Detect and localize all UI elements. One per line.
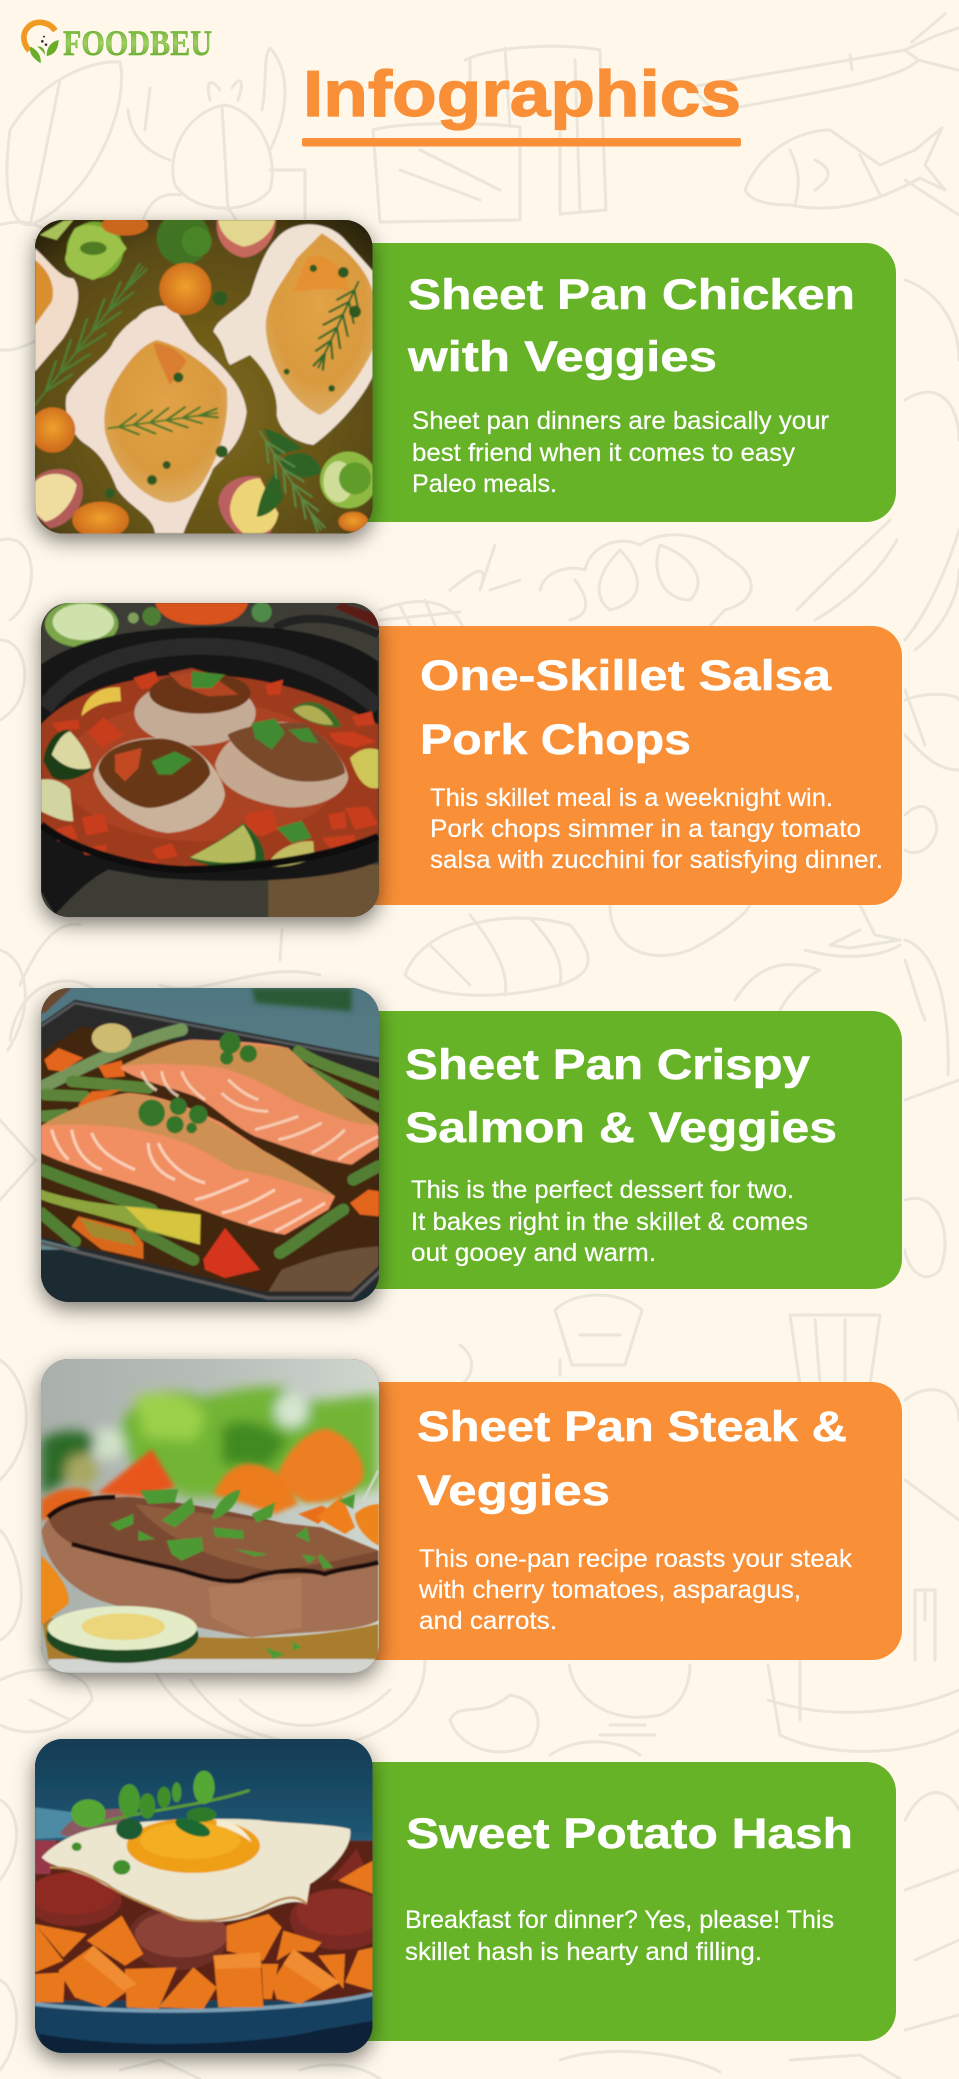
card [340,243,896,522]
panel: sweet potato hash [25,1734,896,2059]
body text: Breakfast for dinner? Yes, please! This [405,1906,834,1934]
card [345,626,902,905]
heading: Sweet Potato Hash [406,1810,853,1858]
body text [412,407,829,498]
body text: skillet hash is hearty and filling. [405,1938,762,1966]
title: Infographics [303,57,741,130]
heading [405,1041,837,1152]
image shadow [41,603,379,917]
card [345,1382,902,1660]
photo: fried egg over sweet potato hash [35,1739,372,2053]
body text: best friend when it comes to easy [412,439,796,467]
panel: one-skillet salsa pork chops [35,598,902,923]
body text: It bakes right in the skillet & comes [411,1208,808,1236]
body text [411,1176,808,1267]
heading: Salmon & Veggies [405,1104,837,1152]
body text: This skillet meal is a weeknight win. [430,784,833,812]
card [345,1011,902,1289]
image shadow [41,1359,379,1673]
panel: sheet pan chicken [26,212,896,540]
heading: Sheet Pan Crispy [405,1041,810,1089]
body text: and carrots. [419,1607,557,1635]
heading: with Veggies [407,333,717,381]
panel: sheet pan crispy salmon [35,983,902,1308]
photo: chicken and vegetables [26,212,380,540]
icon: logo ring and leaves [24,22,59,63]
body text: Paleo meals. [412,470,557,498]
body text: out gooey and warm. [411,1239,656,1267]
image shadow [41,988,379,1302]
body text [405,1906,834,1966]
card [340,1762,896,2041]
body text: This is the perfect dessert for two. [411,1176,794,1204]
heading: Sheet Pan Steak & [417,1403,847,1451]
logo wordmark: FOODBEU [63,23,212,63]
heading: One-Skillet Salsa [420,652,832,700]
body text [430,784,883,874]
title underline [302,138,741,146]
panel: sheet pan steak and veggies [35,1354,902,1679]
image shadow [35,1739,372,2053]
image shadow [35,220,372,534]
body text: with cherry tomatoes, asparagus, [418,1576,801,1604]
heading: Veggies [417,1467,610,1515]
body text: salsa with zucchini for satisfying dinner. [430,846,883,874]
heading [420,652,832,764]
heading [417,1403,847,1515]
heading: Pork Chops [420,716,691,764]
body text: This one-pan recipe roasts your steak [419,1545,853,1573]
body text [418,1545,853,1635]
photo: salmon on sheet pan [35,983,385,1308]
logo [24,22,212,63]
photo: steak with vegetables [35,1354,385,1679]
heading [407,271,855,381]
heading: Sheet Pan Chicken [408,271,855,319]
body text: Pork chops simmer in a tangy tomato [430,815,861,843]
photo: pork chops in skillet [35,598,385,923]
body text: Sheet pan dinners are basically your [412,407,829,435]
